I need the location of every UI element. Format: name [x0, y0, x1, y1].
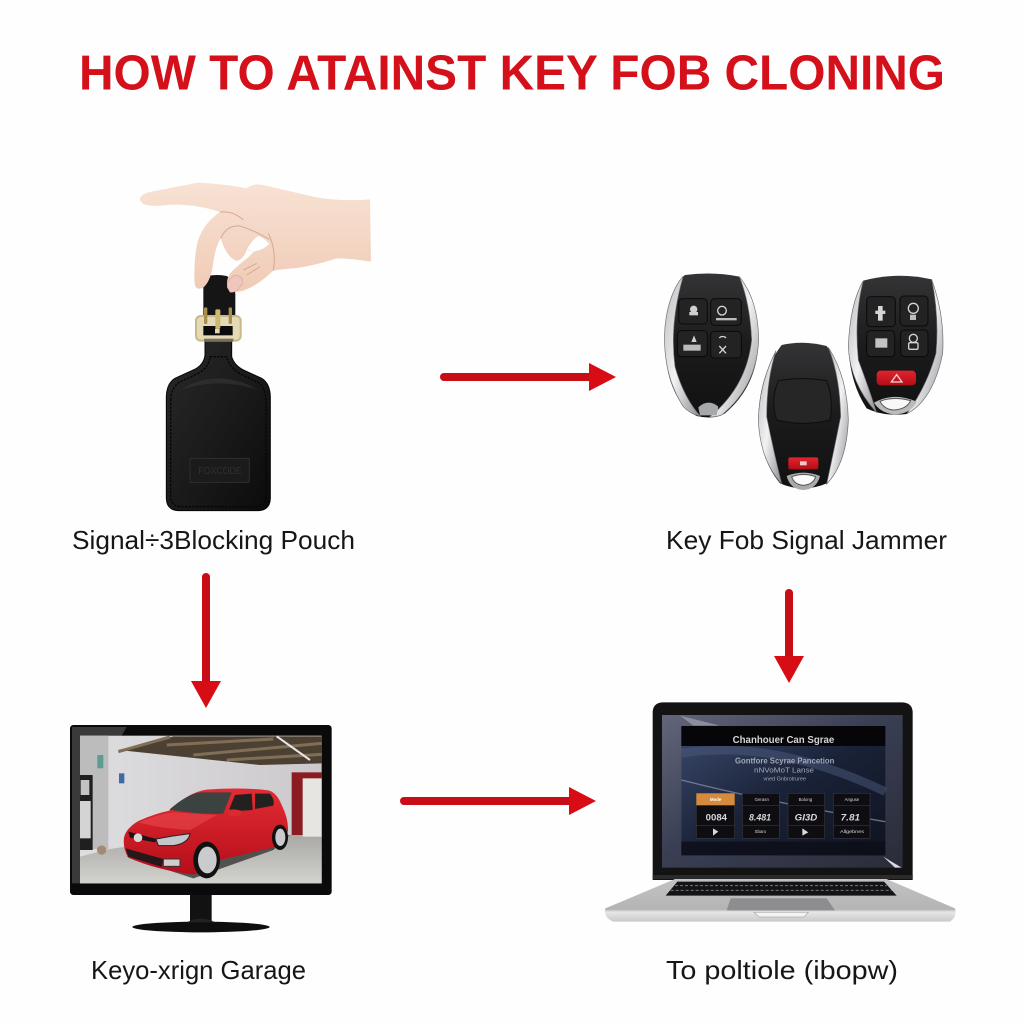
icon: monitor frame: [70, 725, 332, 895]
icon: gold buckle: [196, 307, 241, 342]
icon: laptop lid: [653, 702, 913, 880]
icon: pouch body: [166, 338, 270, 511]
icon: pouch strap: [203, 275, 235, 327]
laptop screen: 0084: [706, 812, 728, 822]
arrow: pouch down to garage monitor: [191, 577, 221, 708]
icon: keyboard: [666, 882, 897, 896]
arrow: pouch to fobs: [444, 363, 616, 391]
icon: laptop base: [605, 878, 956, 922]
laptop screen: Bolong: [799, 797, 813, 802]
laptop screen: Gerasn: [755, 797, 769, 802]
illustration: laptop with dashboard: [605, 702, 956, 922]
laptop screen: 8.481: [749, 812, 771, 822]
icon: left fob: [665, 274, 759, 417]
laptop screen: [662, 715, 903, 868]
icon: embossed label: [190, 458, 249, 482]
illustration: monitor showing car in garage: [70, 725, 332, 932]
laptop screen: Mode: [710, 797, 722, 802]
garage scene: [80, 736, 322, 883]
illustration: three key fobs: [665, 274, 943, 490]
icon: right fob: [848, 276, 943, 415]
icon: trackpad: [727, 898, 835, 910]
laptop screen: Chanhouer Can Sgrae: [733, 735, 835, 746]
icon: red car: [124, 788, 290, 878]
arrow: garage to laptop: [404, 787, 596, 815]
illustration: hand holding signal-blocking pouch: [140, 183, 371, 511]
icon: monitor stand: [132, 895, 270, 932]
label: laptop caption: To poltiole (ibopw): [666, 955, 898, 985]
label: key fob signal jammer: Key Fob Signal Jammer: [666, 525, 947, 555]
laptop screen: vned Gnbrotruree: [763, 777, 806, 783]
laptop screen: nNVoMoT Lanse: [754, 767, 814, 774]
laptop screen: GI3D: [795, 812, 818, 822]
title: HOW TO ATAINST KEY FOB CLONING: [79, 46, 945, 100]
laptop screen: Sbaro: [755, 829, 767, 834]
label: garage: Keyo-xrign Garage: [91, 955, 306, 985]
laptop screen: Gontfore Scyrae Pancetion: [735, 756, 834, 766]
icon: embossed label: FOXCODE: [198, 466, 242, 477]
icon: centre fob: [758, 343, 848, 490]
laptop screen: Allgebnes: [840, 829, 864, 834]
arrow: fobs down to laptop: [774, 593, 804, 683]
laptop screen: 7.81: [841, 812, 860, 822]
label: signal-blocking pouch: Signal÷3Blocking Pouch: [72, 525, 355, 555]
icon: hand: [140, 183, 371, 292]
laptop screen: Anguse: [845, 797, 860, 802]
